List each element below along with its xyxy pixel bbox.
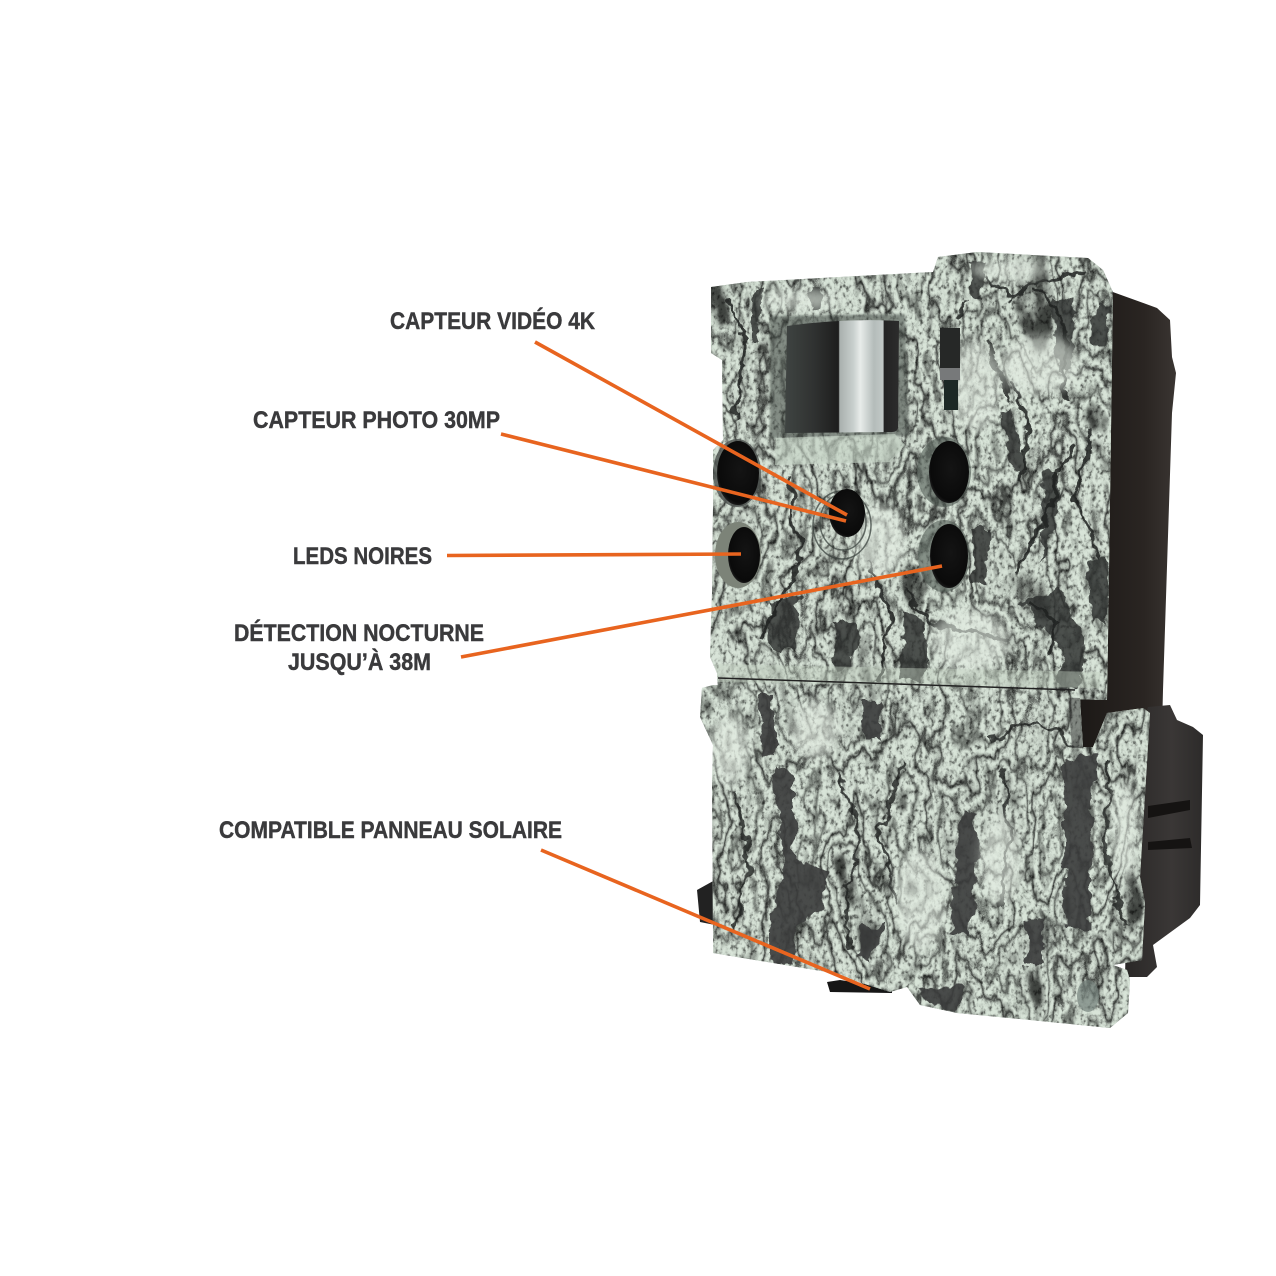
camera lens xyxy=(813,489,871,559)
label: night detection xyxy=(234,619,484,676)
LED top left xyxy=(713,439,761,507)
camera illustration xyxy=(690,240,1203,1040)
light bark patches xyxy=(760,260,1080,670)
line: black LEDs xyxy=(447,554,741,556)
bottom ledge xyxy=(715,664,1100,688)
callout lines xyxy=(447,342,942,989)
bottom right screw xyxy=(1077,980,1099,1012)
LED bottom left xyxy=(715,522,761,588)
lower bark streaks xyxy=(757,695,1098,1010)
seam shadow xyxy=(1068,695,1083,748)
frame under sensor xyxy=(775,434,905,465)
label: night detection: JUSQU’À 38M xyxy=(288,648,431,676)
side slot xyxy=(940,328,960,410)
light lower patches xyxy=(710,700,1137,950)
line: night detection xyxy=(461,566,942,657)
lower camouflage body xyxy=(700,685,1150,1028)
lower bark cracks xyxy=(735,720,1125,950)
camera rear housing xyxy=(1070,291,1176,760)
left side tab xyxy=(697,880,715,925)
LED top right xyxy=(917,437,971,507)
upper camouflage body xyxy=(710,252,1113,700)
upper bark streaks xyxy=(752,262,1110,690)
line: video sensor xyxy=(535,342,847,515)
label: night detection: DÉTECTION NOCTURNE xyxy=(234,619,484,647)
label: video sensor: CAPTEUR VIDÉO 4K xyxy=(390,307,595,335)
mounting strap xyxy=(1125,705,1203,977)
LED bottom right xyxy=(918,520,970,592)
label: photo sensor: CAPTEUR PHOTO 30MP xyxy=(253,407,500,434)
body seam xyxy=(718,678,1075,690)
hand-placed bark cracks xyxy=(730,270,1100,680)
bottom tab xyxy=(827,980,892,993)
line: photo sensor xyxy=(501,434,846,521)
strap notches xyxy=(1148,800,1192,850)
label: solar panel: COMPATIBLE PANNEAU SOLAIRE xyxy=(219,817,562,844)
line: solar panel xyxy=(541,850,870,989)
label: black LEDs: LEDS NOIRES xyxy=(293,543,432,570)
motion sensor window xyxy=(770,314,908,438)
